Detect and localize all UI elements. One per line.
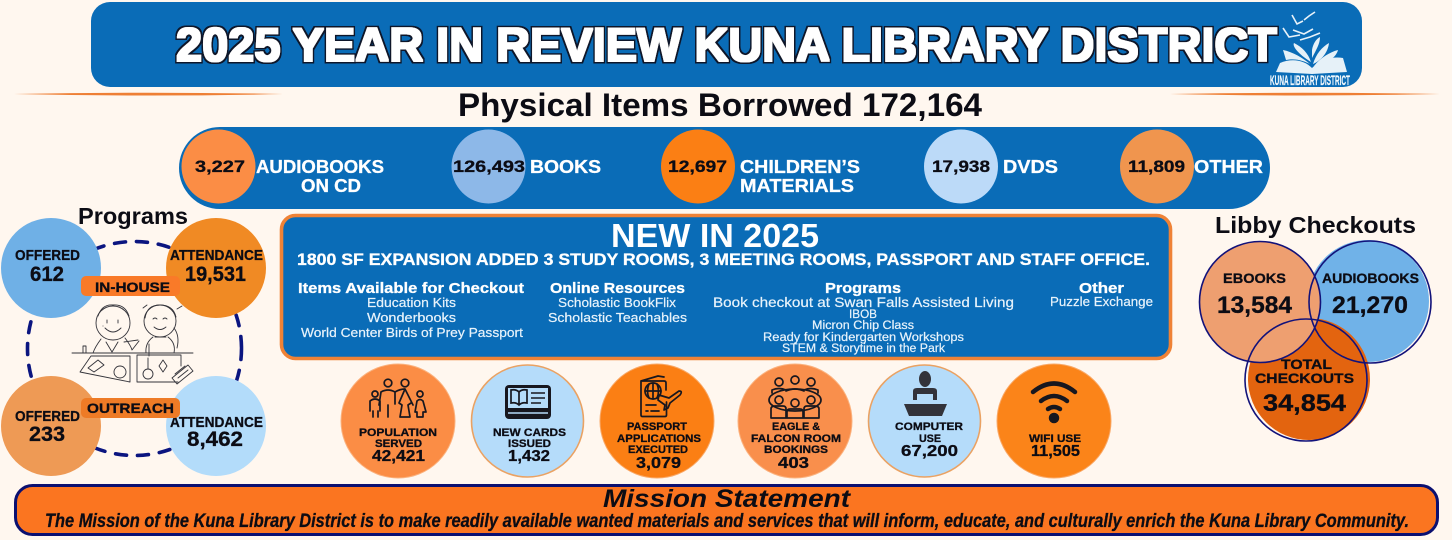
icon: passport — [641, 376, 681, 416]
stat: other — [1120, 130, 1263, 204]
icon: wifi — [1033, 384, 1075, 421]
heading: libby checkouts: Libby Checkouts — [1215, 212, 1416, 238]
stat circle: population served: SERVED — [375, 438, 422, 450]
stat: children's materials: MATERIALS — [740, 176, 854, 196]
stat circle: new cards issued: ISSUED — [508, 438, 551, 450]
stat: DVDs — [924, 130, 1058, 204]
value: total checkouts — [1255, 356, 1354, 417]
circle: in-house offered: 612 — [30, 263, 64, 286]
value: ebooks: EBOOKS — [1223, 270, 1286, 286]
stat circle: wifi use — [997, 364, 1111, 478]
orange divider right — [1170, 93, 1440, 96]
stat circle: computer use: COMPUTER — [895, 421, 963, 433]
heading: programs: Programs — [78, 203, 188, 229]
panel: new in 2025 — [282, 216, 1170, 358]
stat circle: new cards issued: NEW CARDS — [493, 427, 566, 439]
list: items available for checkout: Wonderbooks — [367, 310, 457, 325]
stat circle: population served: POPULATION — [359, 427, 437, 439]
stat: books: 126,493 — [453, 157, 525, 176]
list: other: Puzzle Exchange — [1050, 294, 1153, 309]
circle: outreach offered — [1, 376, 101, 476]
list: online resources: Online Resources — [550, 280, 685, 297]
stat circle: population served: 42,421 — [372, 448, 425, 465]
icon: library card — [505, 385, 551, 419]
list: programs: STEM & Storytime in the Park — [782, 343, 945, 355]
stat: children's materials: 12,697 — [668, 157, 727, 176]
circle: in-house attendance: ATTENDANCE — [170, 247, 263, 264]
stat circle: new cards issued: 1,432 — [508, 448, 550, 465]
circle: outreach attendance: 8,462 — [187, 428, 243, 451]
value: total checkouts: CHECKOUTS — [1255, 370, 1354, 386]
stat: audiobooks on CD — [182, 130, 384, 204]
stat circle: wifi use: WIFI USE — [1029, 433, 1081, 445]
heading: new in 2025: NEW IN 2025 — [611, 217, 819, 254]
stat circle: new cards issued — [472, 365, 584, 477]
value: ebooks — [1217, 270, 1293, 319]
stat circle: computer use — [868, 365, 980, 477]
stat circle: passport applications executed: 3,079 — [636, 455, 681, 472]
stat: DVDs: 17,938 — [932, 157, 990, 176]
label: outreach — [81, 398, 180, 418]
stat circle: eagle and falcon room bookings: BOOKINGS — [764, 444, 828, 456]
icon: computer user — [904, 371, 947, 416]
stat: audiobooks on CD: 3,227 — [195, 157, 245, 176]
circle: in-house attendance: 19,531 — [185, 263, 246, 286]
panel: mission statement — [16, 485, 1438, 534]
list: items available for checkout — [298, 280, 524, 340]
value: audiobooks — [1322, 270, 1419, 319]
list: programs: Ready for Kindergarten Workshops — [763, 332, 964, 344]
title banner — [91, 2, 1362, 87]
stat: DVDs: DVDS — [1003, 157, 1058, 177]
illustration: children doing crafts — [72, 305, 193, 384]
circle: outreach attendance — [166, 376, 266, 476]
stat circle: passport applications executed: PASSPORT — [627, 421, 687, 433]
title: 2025 YEAR IN REVIEW KUNA LIBRARY DISTRICT — [176, 18, 1277, 71]
list: items available for checkout: Education Kits — [367, 295, 457, 310]
value: ebooks: 13,584 — [1217, 292, 1293, 319]
value: total checkouts: TOTAL — [1281, 356, 1332, 372]
stat circle: computer use: USE — [919, 433, 941, 445]
stat: other: 11,809 — [1128, 157, 1185, 176]
circle: in-house offered: OFFERED — [15, 247, 80, 264]
list: other: Other — [1079, 280, 1124, 297]
value: audiobooks: AUDIOBOOKS — [1322, 270, 1419, 286]
value: total checkouts: 34,854 — [1263, 390, 1347, 417]
stat: children's materials — [661, 130, 860, 204]
list: programs: Programs — [825, 280, 901, 297]
icon: meeting room — [769, 376, 821, 418]
list: online resources: Scholastic BookFlix — [558, 295, 677, 310]
panel: programs — [1, 203, 266, 476]
stat circle: eagle and falcon room bookings: EAGLE & — [772, 421, 820, 433]
circle: outreach offered: OFFERED — [15, 408, 80, 425]
label: in-house: IN-HOUSE — [95, 279, 170, 295]
panel: libby checkouts — [1200, 212, 1431, 441]
list: other — [1050, 280, 1153, 309]
icon: family — [370, 379, 426, 417]
list: programs — [713, 280, 1014, 355]
text: KUNA LIBRARY DISTRICT — [1270, 72, 1350, 88]
heading: physical items: Physical Items Borrowed 172,164 — [458, 87, 982, 123]
circle: in-house offered — [1, 218, 101, 318]
value: audiobooks: 21,270 — [1332, 292, 1408, 319]
expansion statement: 1800 SF EXPANSION ADDED 3 STUDY ROOMS, 3 MEETING ROOMS, PASSPORT AND STAFF OFFICE. — [297, 250, 1150, 269]
circle: outreach attendance: ATTENDANCE — [170, 414, 263, 431]
stat circle: eagle and falcon room bookings: FALCON ROOM — [751, 433, 841, 445]
list: programs: IBOB — [849, 309, 877, 321]
list: programs: Micron Chip Class — [812, 320, 914, 332]
stat: audiobooks on CD: ON CD — [301, 176, 361, 196]
stat: other: OTHER — [1194, 157, 1263, 177]
heading: mission statement: Mission Statement — [603, 485, 852, 513]
list: items available for checkout: Items Available for Checkout — [298, 280, 524, 297]
stat circle: eagle and falcon room bookings: 403 — [778, 455, 809, 472]
panel: physical items band — [179, 127, 1270, 209]
stat circle: wifi use: 11,505 — [1031, 443, 1080, 460]
label: in-house — [81, 276, 180, 296]
logo: Kuna Library District — [1270, 12, 1350, 88]
stat: children's materials: CHILDREN’S — [740, 157, 860, 177]
list: programs: Book checkout at Swan Falls Assisted Living — [713, 294, 1014, 310]
stat circle: computer use: 67,200 — [901, 443, 958, 460]
circle: in-house attendance — [166, 218, 266, 318]
orange divider left — [14, 93, 283, 96]
stat circle: passport applications executed: APPLICATIONS — [617, 433, 701, 445]
stat: books: BOOKS — [530, 157, 601, 177]
list: items available for checkout: World Center Birds of Prey Passport — [301, 325, 523, 340]
stat circle: population served — [341, 364, 455, 478]
list: online resources — [548, 280, 688, 325]
stat circle: passport applications executed: EXECUTED — [628, 444, 688, 456]
list: online resources: Scholastic Teachables — [548, 310, 688, 325]
stat circle: eagle and falcon room bookings — [738, 364, 852, 478]
label: outreach: OUTREACH — [87, 400, 174, 416]
stat: audiobooks on CD: AUDIOBOOKS — [256, 157, 384, 177]
stat: books — [452, 130, 601, 204]
stat circle: passport applications executed — [600, 364, 714, 478]
circle: outreach offered: 233 — [29, 423, 65, 446]
